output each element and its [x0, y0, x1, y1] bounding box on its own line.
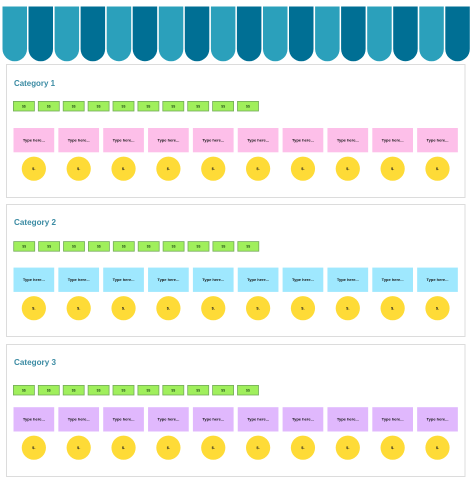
- panel 3 frame: [6, 344, 465, 476]
- price circles row: $.: [436, 166, 439, 171]
- price tags row: $$: [47, 388, 51, 392]
- price circles row: $.: [122, 306, 125, 311]
- price tags row: $$: [97, 388, 101, 392]
- item boxes row: Type here...: [202, 138, 224, 142]
- item boxes row: Type here...: [427, 417, 448, 422]
- item boxes row: Type here...: [157, 417, 179, 422]
- item boxes row: Type here...: [157, 138, 179, 142]
- price tags row: $$: [146, 388, 150, 392]
- panel 1 frame: [6, 64, 465, 198]
- price tags row: $$: [72, 245, 76, 249]
- price circles row: $.: [346, 306, 349, 311]
- item boxes row: Type here...: [382, 417, 404, 422]
- price circles row: $.: [167, 166, 170, 171]
- price circles row: [22, 157, 450, 181]
- price tags row: $$: [47, 245, 51, 249]
- price tags row: $$: [147, 245, 151, 249]
- item boxes row: Type here...: [427, 277, 448, 282]
- price tags row: $$: [221, 388, 225, 392]
- price tags row: [13, 385, 259, 395]
- item boxes row: Type here...: [427, 138, 448, 142]
- price circles row: $.: [32, 445, 36, 450]
- item boxes row: Type here...: [68, 138, 90, 142]
- price tags row: [13, 101, 259, 111]
- price tags row: $$: [97, 245, 101, 249]
- item boxes row: Type here...: [337, 417, 359, 422]
- price tags row: $$: [197, 245, 200, 249]
- price circles row: $.: [436, 445, 439, 450]
- price circles row: $.: [436, 306, 439, 311]
- price tags row: $$: [246, 245, 250, 249]
- price circles row: $.: [346, 445, 349, 450]
- price tags row: $$: [122, 245, 126, 249]
- item boxes row: Type here...: [202, 417, 224, 422]
- price circles row: $.: [212, 166, 215, 171]
- price tags row: $$: [97, 104, 101, 108]
- price tags row: $$: [171, 388, 175, 392]
- price tags row: $$: [72, 104, 76, 108]
- price tags row: $$: [122, 388, 125, 392]
- item boxes row: Type here...: [68, 277, 90, 282]
- price circles row: $.: [346, 166, 349, 171]
- item boxes row: Type here...: [337, 277, 359, 282]
- price tags row: $$: [22, 388, 26, 392]
- item boxes row: Type here...: [337, 138, 359, 142]
- price tags row: $$: [221, 245, 225, 249]
- price tags row: $$: [196, 104, 200, 108]
- price circles row: $.: [77, 445, 80, 450]
- price circles row: [22, 436, 450, 460]
- panel 2 frame: [6, 204, 465, 336]
- item boxes row: Type here...: [292, 138, 314, 142]
- heading: category 3: Category 3: [14, 357, 56, 367]
- price tags row: [14, 242, 259, 251]
- price circles row: $.: [301, 445, 305, 450]
- heading: category 2: Category 2: [14, 217, 56, 227]
- price circles row: $.: [32, 306, 36, 311]
- price circles row: $.: [212, 445, 215, 450]
- price circles row: $.: [167, 445, 170, 450]
- price tags row: $$: [246, 388, 250, 392]
- item boxes row: Type here...: [247, 417, 269, 422]
- price circles row: $.: [391, 445, 394, 450]
- item boxes row: Type here...: [23, 138, 45, 142]
- price tags row: $$: [171, 104, 175, 108]
- item boxes row: Type here...: [382, 138, 404, 142]
- panel: category 2: [6, 204, 465, 336]
- item boxes row: Type here...: [157, 277, 179, 282]
- price tags row: $$: [122, 104, 125, 108]
- price circles row: $.: [32, 166, 36, 171]
- price circles row: [22, 296, 450, 320]
- price circles row: $.: [256, 445, 260, 450]
- price tags row: $$: [196, 388, 200, 392]
- item boxes row: [14, 268, 458, 292]
- price circles row: $.: [77, 306, 80, 311]
- price tags row: $$: [47, 104, 51, 108]
- price tags row: $$: [221, 104, 225, 108]
- price circles row: $.: [122, 445, 125, 450]
- awning: striped scalloped canopy: [2, 6, 470, 61]
- price circles row: $.: [301, 306, 305, 311]
- item boxes row: Type here...: [247, 277, 269, 282]
- price circles row: $.: [301, 166, 305, 171]
- panel: category 3: [6, 344, 465, 476]
- price tags row: $$: [22, 104, 26, 108]
- item boxes row: Type here...: [113, 277, 135, 282]
- item boxes row: Type here...: [292, 277, 314, 282]
- price circles row: $.: [122, 166, 125, 171]
- item boxes row: Type here...: [68, 417, 90, 422]
- item boxes row: Type here...: [23, 417, 45, 422]
- heading: category 1: Category 1: [14, 78, 55, 88]
- panel: category 1: [6, 64, 465, 198]
- item boxes row: Type here...: [113, 417, 135, 422]
- item boxes row: Type here...: [23, 277, 45, 282]
- item boxes row: [14, 407, 458, 432]
- price circles row: $.: [256, 166, 260, 171]
- price tags row: $$: [146, 104, 150, 108]
- price circles row: $.: [167, 306, 170, 311]
- price circles row: $.: [391, 306, 394, 311]
- item boxes row: Type here...: [202, 277, 224, 282]
- item boxes row: Type here...: [247, 138, 269, 142]
- item boxes row: Type here...: [113, 138, 135, 142]
- item boxes row: Type here...: [292, 417, 314, 422]
- price tags row: $$: [172, 245, 176, 249]
- price circles row: $.: [391, 166, 394, 171]
- price circles row: $.: [212, 306, 215, 311]
- price circles row: $.: [77, 166, 80, 171]
- price circles row: $.: [256, 306, 260, 311]
- price tags row: $$: [246, 104, 250, 108]
- price tags row: $$: [72, 388, 76, 392]
- item boxes row: [14, 128, 458, 152]
- price tags row: $$: [22, 245, 26, 249]
- item boxes row: Type here...: [382, 277, 404, 282]
